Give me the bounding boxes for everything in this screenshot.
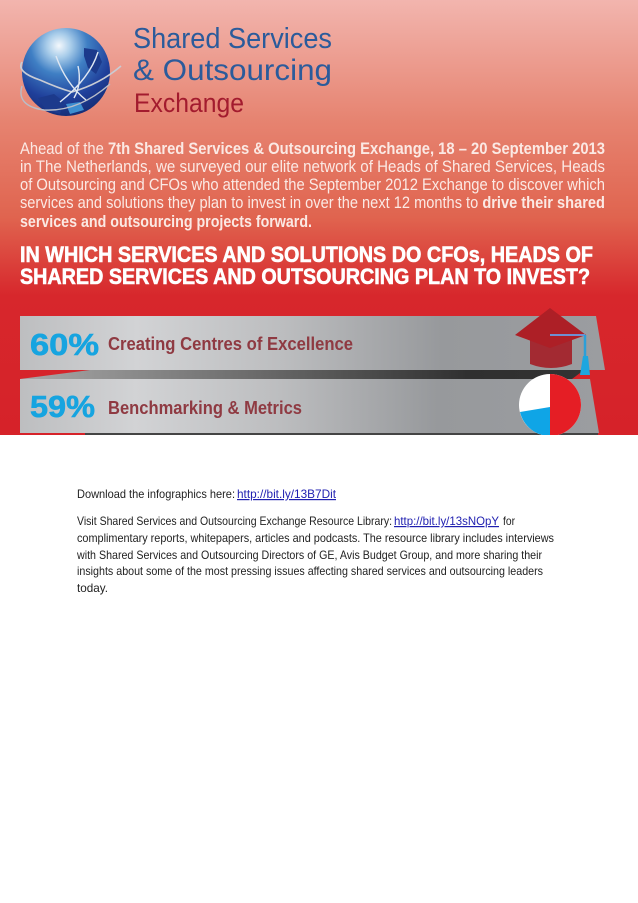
text: resource library paragraph: Visit Shared Services and Outsourcing Exchange Resource Library: xyxy=(77,514,392,528)
heading xyxy=(20,242,593,289)
label: Benchmarking & Metrics: Benchmarking & Metrics xyxy=(108,398,302,418)
red gradient banner background xyxy=(0,0,638,435)
shadow band between bars xyxy=(20,370,584,379)
stat: 59%: 59% xyxy=(30,389,95,424)
panel: 60% bar xyxy=(20,316,605,370)
intro text block xyxy=(20,140,605,231)
icon: globe with orbit rings xyxy=(21,28,121,116)
text: resource library paragraph xyxy=(76,514,554,595)
link: library url: http://bit.ly/13sNOpY xyxy=(394,514,499,528)
heading: IN WHICH SERVICES AND SOLUTIONS DO CFOs, HEADS OF xyxy=(20,242,593,267)
logo xyxy=(21,23,332,118)
icon: pie chart xyxy=(519,374,581,436)
text: resource library paragraph: today. xyxy=(77,581,108,595)
text: resource library paragraph: for xyxy=(503,514,515,528)
logo wordmark: Shared Services: Shared Services xyxy=(133,23,332,55)
text: resource library paragraph: insights about some of the most pressing issues affecting shared services and outsourcing leaders xyxy=(77,564,543,578)
text: resource library paragraph: complimentary reports, whitepapers, articles and podcasts. The resource library includes interviews xyxy=(77,531,554,545)
text: download line xyxy=(77,487,337,501)
link: download url: http://bit.ly/13B7Dit xyxy=(237,487,337,501)
icon: graduation cap xyxy=(515,308,590,375)
intro text block: services and outsourcing projects forward. xyxy=(20,213,312,231)
bottom shadow line xyxy=(85,433,598,435)
text: resource library paragraph: with Shared Services and Outsourcing Directors of GE, Avis Budget Group, and more sharing their xyxy=(76,548,542,562)
logo wordmark: & Outsourcing: & Outsourcing xyxy=(133,54,332,87)
stat: 60%: 60% xyxy=(30,327,99,362)
intro text block: services and solutions they plan to invest in over the next 12 months to drive their shared xyxy=(20,194,605,212)
panel: 59% bar xyxy=(20,379,599,433)
label: Creating Centres of Excellence: Creating Centres of Excellence xyxy=(108,334,353,354)
heading: SHARED SERVICES AND OUTSOURCING PLAN TO INVEST? xyxy=(20,264,590,289)
logo wordmark: Exchange: Exchange xyxy=(134,88,244,118)
text: download line: Download the infographics here: xyxy=(77,487,235,501)
